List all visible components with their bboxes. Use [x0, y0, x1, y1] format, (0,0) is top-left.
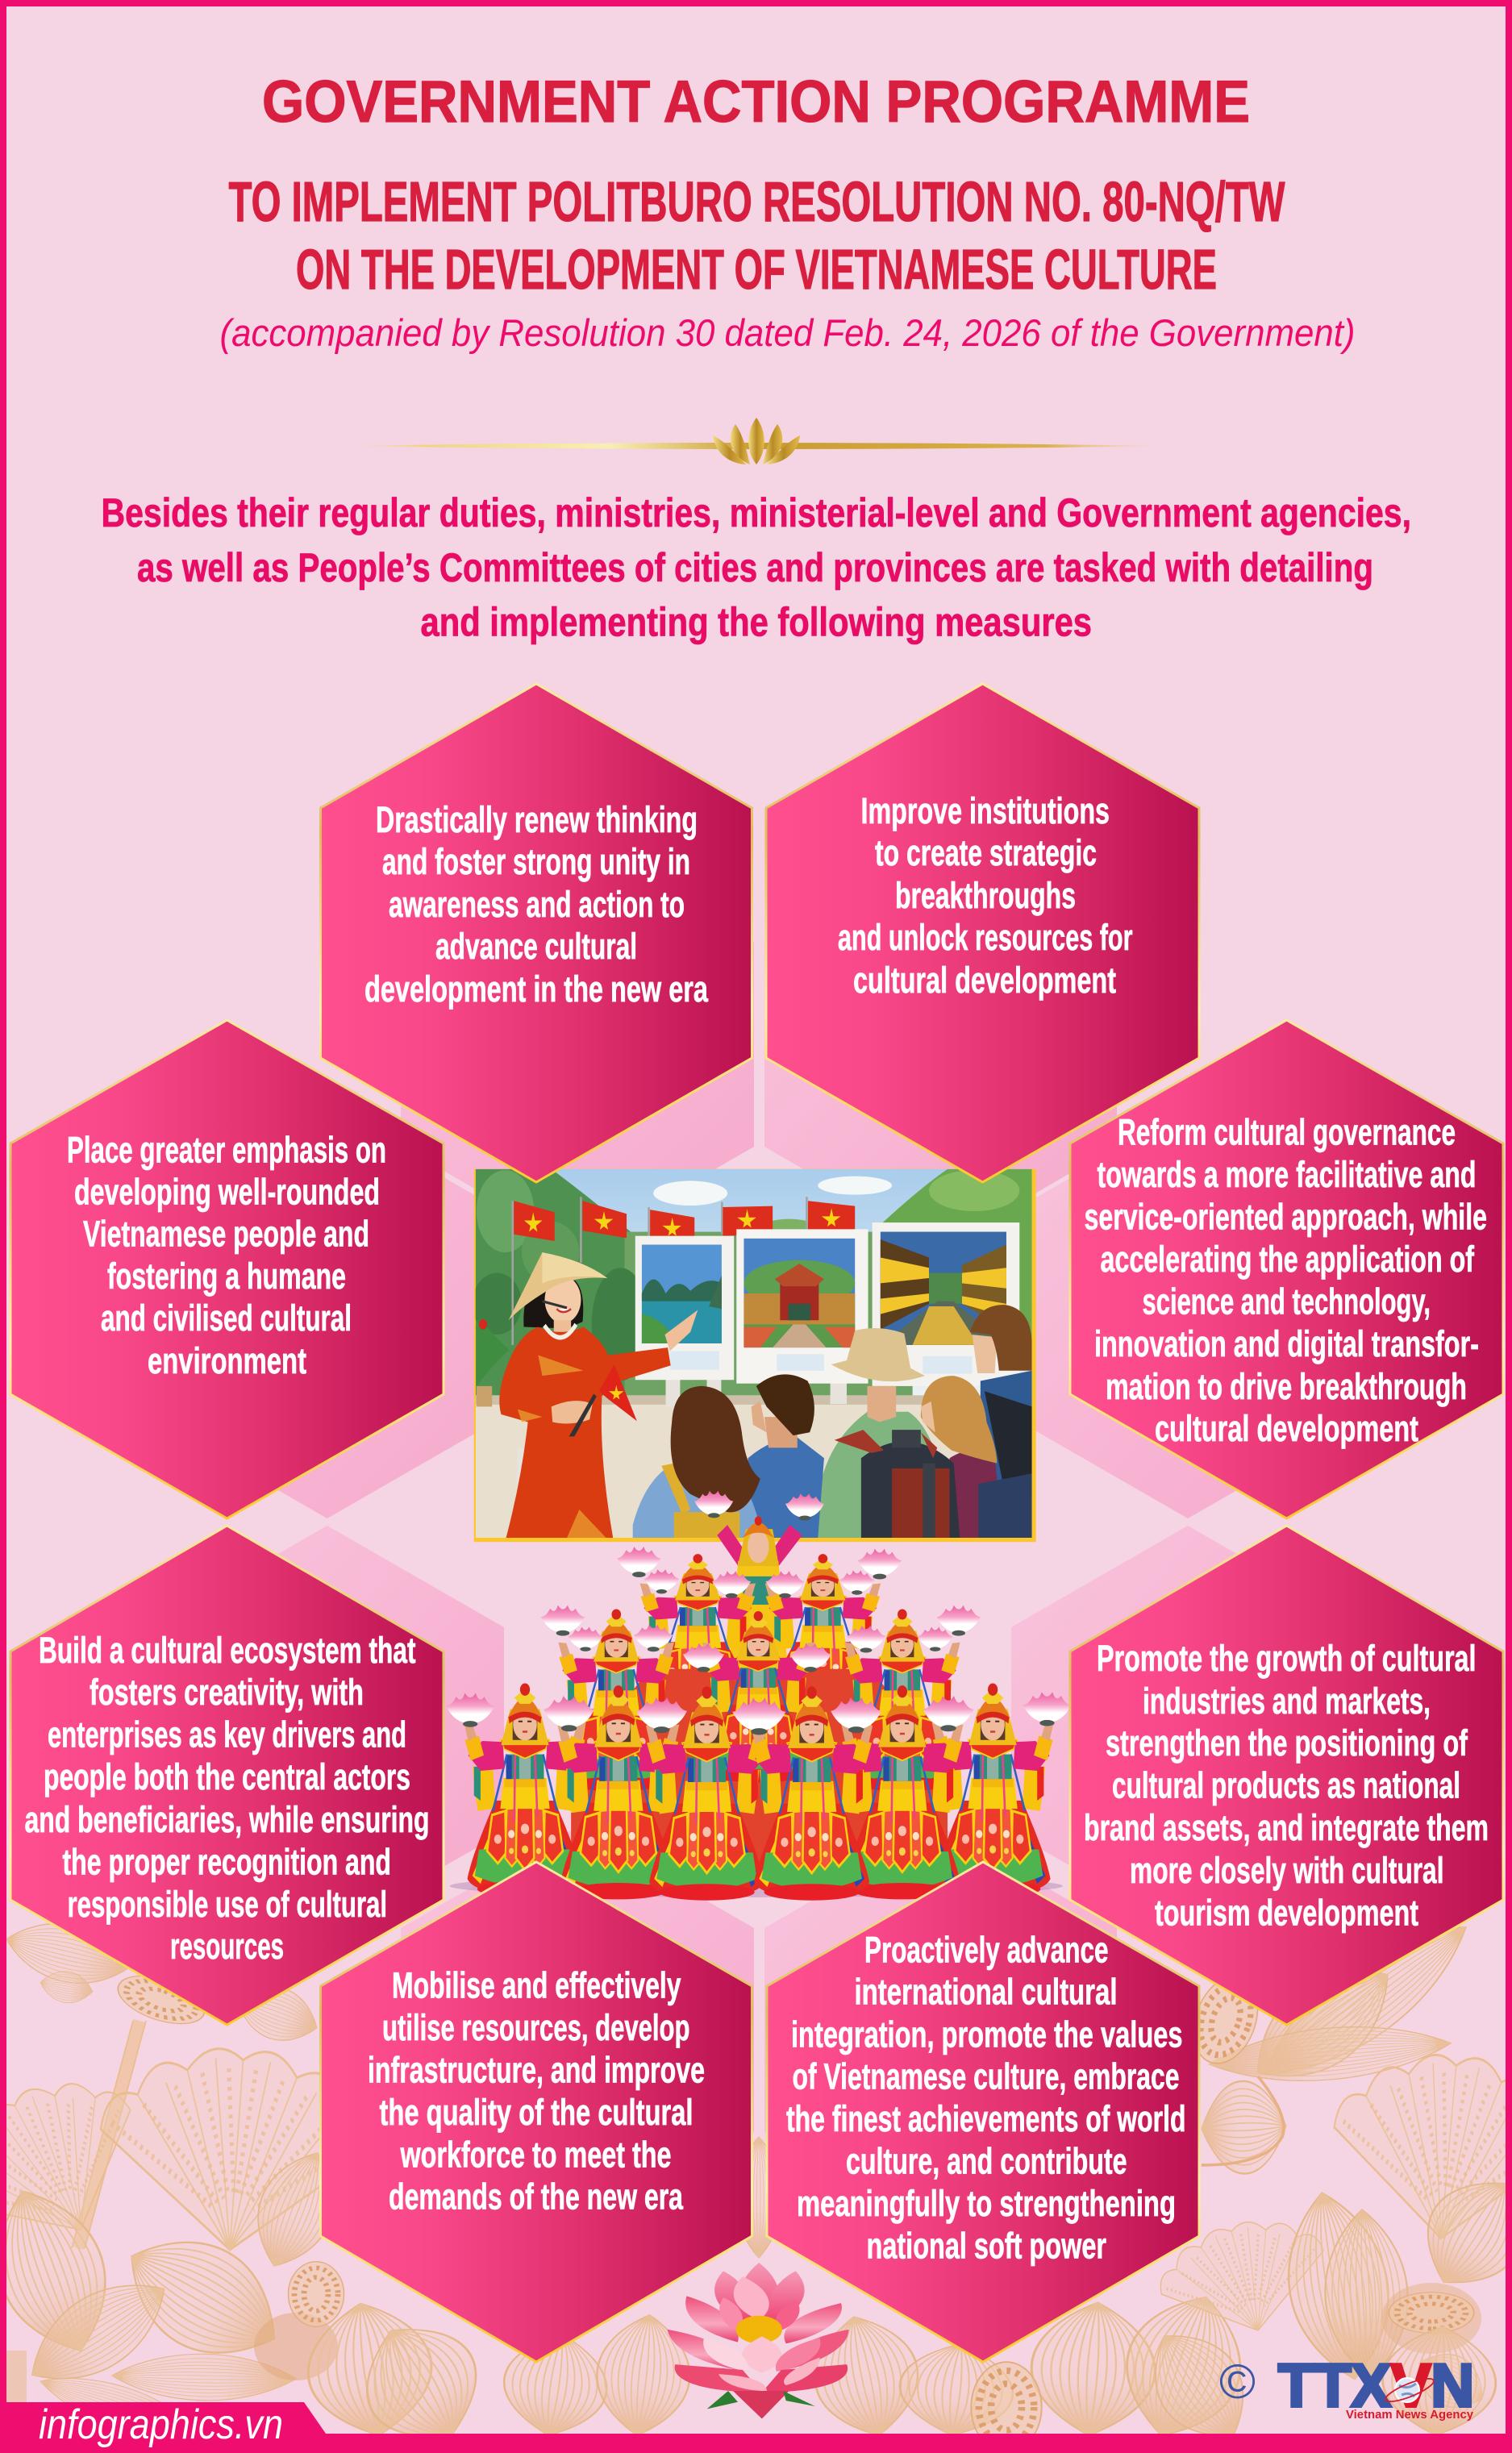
- hexagon: cultural ecosystem: resources: [170, 1926, 284, 1967]
- tourists: [633, 1305, 1032, 1540]
- hexagon: cultural ecosystem: and beneficiaries, while ensuring: [24, 1799, 429, 1840]
- copyright and TTXVN logo: ©: [1219, 2355, 1256, 2409]
- hexagon: renew thinking: Drastically renew thinking: [376, 799, 698, 840]
- title: GOVERNMENT ACTION PROGRAMME: [262, 69, 1250, 135]
- hexagon: renew thinking: and foster strong unity in: [382, 841, 690, 882]
- hexagon: cultural industries: tourism development: [1155, 1892, 1418, 1934]
- pale hexagon backdrop: [151, 841, 1364, 2234]
- hexagon: improve institutions: [766, 684, 1199, 1182]
- hexagon: improve institutions: breakthroughs: [895, 875, 1076, 916]
- hexagon: international integration: the finest achievements of world: [786, 2098, 1185, 2139]
- hexagon: cultural ecosystem: people both the central actors: [44, 1756, 410, 1797]
- photo: tour guide presenting heritage boards to tourists: [473, 1169, 1036, 1542]
- hexagon: cultural governance: cultural development: [1155, 1408, 1418, 1449]
- copyright and TTXVN logo: Vietnam News Agency: [1346, 2408, 1474, 2422]
- hexagon: cultural ecosystem: enterprises as key drivers and: [48, 1714, 406, 1755]
- lotus line-art background: [0, 1898, 1512, 2453]
- hexagon: well-rounded people: developing well-rounded: [74, 1171, 380, 1213]
- hexagon: cultural industries: [1070, 1526, 1503, 2025]
- hexagon: mobilise resources: infrastructure, and improve: [368, 2050, 705, 2090]
- hexagon: renew thinking: [321, 684, 752, 1182]
- globe emblem: [1383, 2375, 1436, 2405]
- hexagon: cultural ecosystem: Build a cultural ecosystem that: [39, 1630, 416, 1671]
- hexagon: cultural ecosystem: the proper recognition and: [63, 1842, 391, 1882]
- hexagon: international integration: of Vietnamese culture, embrace: [792, 2056, 1179, 2097]
- hexagon: mobilise resources: [321, 1862, 752, 2362]
- third row: [617, 1547, 902, 1714]
- hexagon: renew thinking: awareness and action to: [389, 884, 685, 925]
- copyright and TTXVN logo: TTXVN: [1278, 2351, 1474, 2419]
- front row: [446, 1684, 1072, 1901]
- hexagon: international integration: Proactively advance: [864, 1929, 1108, 1971]
- hexagon: international integration: international cultural: [855, 1971, 1118, 2013]
- gold lotus divider: [345, 418, 1169, 464]
- stage shadow: [450, 1875, 1063, 1897]
- hexagon: well-rounded people: environment: [148, 1340, 306, 1381]
- infographics.vn tab: infographics.vn: [39, 2401, 283, 2448]
- hexagon: improve institutions: cultural development: [853, 960, 1116, 1001]
- hexagon: mobilise resources: utilise resources, develop: [382, 2007, 690, 2048]
- hexagon: cultural ecosystem: fosters creativity, with: [90, 1672, 364, 1713]
- dancers with lotus lanterns: [446, 1491, 1072, 1901]
- hexagon: well-rounded people: Vietnamese people and: [83, 1213, 369, 1255]
- hexagon: mobilise resources: the quality of the cultural: [379, 2092, 694, 2133]
- icon: pink lotus flower: [668, 2263, 848, 2419]
- hexagon: mobilise resources: workforce to meet the: [400, 2134, 671, 2176]
- subtitle: [229, 170, 1285, 301]
- hexagon: cultural ecosystem: responsible use of cultural: [68, 1884, 387, 1925]
- boards: [666, 1380, 681, 1406]
- hexagon: international integration: [767, 1862, 1199, 2362]
- hexagon: improve institutions: Improve institutions: [861, 790, 1110, 831]
- hexagon: improve institutions: and unlock resources for: [838, 917, 1132, 958]
- hexagon: well-rounded people: and civilised cultural: [101, 1297, 352, 1339]
- hexagon: cultural governance: [1070, 1020, 1503, 1518]
- hexagon: well-rounded people: [10, 1020, 444, 1518]
- intro paragraph: [102, 490, 1411, 645]
- hexagon: cultural ecosystem: [10, 1526, 444, 2025]
- plant: [477, 1319, 510, 1386]
- hexagon: well-rounded people: fostering a humane: [107, 1256, 346, 1297]
- intro paragraph: and implementing the following measures: [421, 600, 1092, 645]
- top dancer: [694, 1491, 824, 1674]
- hexagon: international integration: culture, and contribute: [846, 2140, 1127, 2182]
- hexagon: improve institutions: to create strategic: [875, 832, 1097, 873]
- hexagon: international integration: meaningfully to strengthening: [797, 2183, 1176, 2224]
- hexagon: renew thinking: development in the new era: [364, 968, 709, 1010]
- hexagon: international integration: integration, promote the values: [791, 2014, 1182, 2055]
- hexagon: well-rounded people: Place greater emphasis on: [67, 1129, 386, 1171]
- note: accompanying resolution: (accompanied by Resolution 30 dated Feb. 24, 2026 of the Government): [219, 311, 1355, 354]
- hexagon: international integration: national soft power: [866, 2226, 1106, 2266]
- hexagon: mobilise resources: demands of the new era: [389, 2176, 684, 2218]
- second row: [541, 1605, 981, 1869]
- hexagon: mobilise resources: Mobilise and effectively: [392, 1964, 681, 2006]
- guide in red ao dai: [499, 1252, 698, 1538]
- flags: [513, 1197, 855, 1345]
- hexagon: renew thinking: advance cultural: [435, 926, 637, 967]
